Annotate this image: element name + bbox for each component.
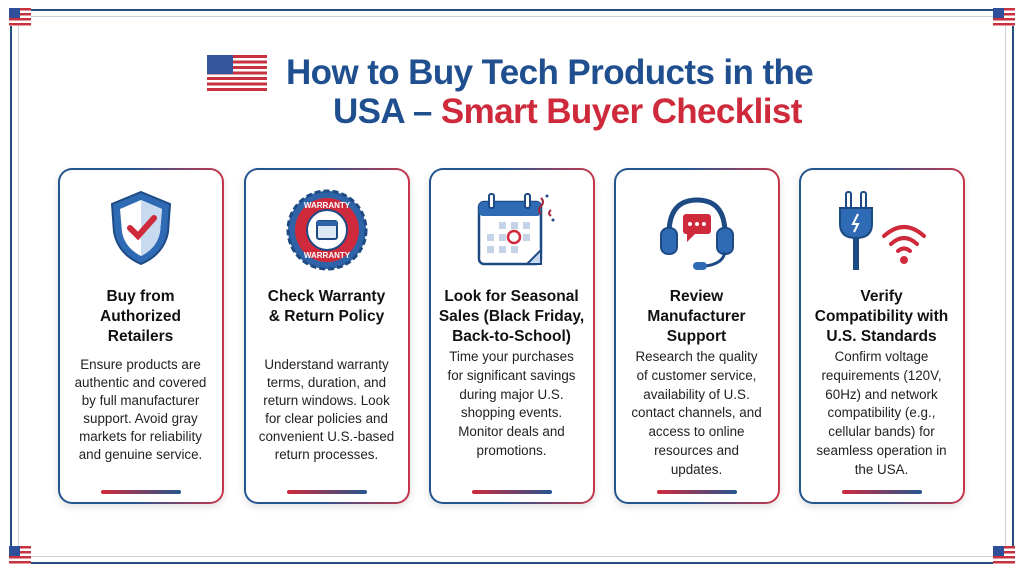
- icon: plug and wifi: [839, 191, 926, 270]
- panel: warranty: [244, 168, 410, 504]
- title: How to Buy Tech Products in the: [286, 53, 813, 92]
- text: of customer service, availability of U.S. contact channels, and access to online resources and: [631, 368, 762, 458]
- heading: Check Warranty: [268, 288, 385, 305]
- heading: U.S. Standards: [826, 328, 937, 345]
- text: Ensure products are authentic and covered by full manufacturer support. Avoid gray markets for reliability and genuine service.: [75, 357, 206, 462]
- heading: Retailers: [108, 328, 173, 345]
- text: Understand warranty terms, duration, and return windows. Look for clear policies and convenient U.S.-based return processes.: [259, 357, 394, 462]
- text: Research the quality: [635, 349, 758, 364]
- heading: Manufacturer: [647, 308, 746, 325]
- icon: shield: [110, 190, 172, 266]
- icon: headset: [660, 198, 734, 270]
- heading: Buy from: [106, 288, 175, 305]
- heading: Verify: [860, 288, 903, 305]
- title: USA – Smart Buyer Checklist: [333, 92, 802, 131]
- title: [286, 53, 813, 131]
- panel: manufacturer support: [614, 168, 780, 504]
- panel: compatibility: [799, 168, 965, 504]
- heading: Authorized: [100, 308, 181, 325]
- heading: Back-to-School): [452, 328, 571, 345]
- heading: & Return Policy: [269, 308, 384, 325]
- text: Confirm voltage requirements (120V, 60Hz) and network compatibility (e.g., cellular bands) for seamless operation in the USA.: [816, 349, 947, 477]
- icon: title flag: [207, 55, 267, 91]
- icon: warranty seal: [286, 190, 368, 270]
- heading: Review: [670, 288, 723, 305]
- icon: calendar: [478, 193, 554, 266]
- icon: warranty seal: WARRANTY: [303, 251, 350, 260]
- heading: Sales (Black Friday,: [439, 308, 584, 325]
- heading: [647, 288, 746, 345]
- text: updates.: [671, 462, 722, 477]
- heading: [815, 288, 948, 345]
- icon: warranty seal: WARRANTY: [303, 201, 350, 210]
- text: Time your purchases for significant savings during major U.S. shopping events. Monitor deals and promotions.: [447, 349, 576, 458]
- heading: [268, 288, 386, 325]
- heading: Support: [667, 328, 726, 345]
- heading: [100, 288, 181, 345]
- panel: seasonal sales: [429, 168, 595, 504]
- heading: [439, 288, 584, 345]
- heading: Look for Seasonal: [444, 288, 579, 305]
- heading: Compatibility with: [815, 308, 948, 325]
- panel: authorized retailers: [58, 168, 224, 504]
